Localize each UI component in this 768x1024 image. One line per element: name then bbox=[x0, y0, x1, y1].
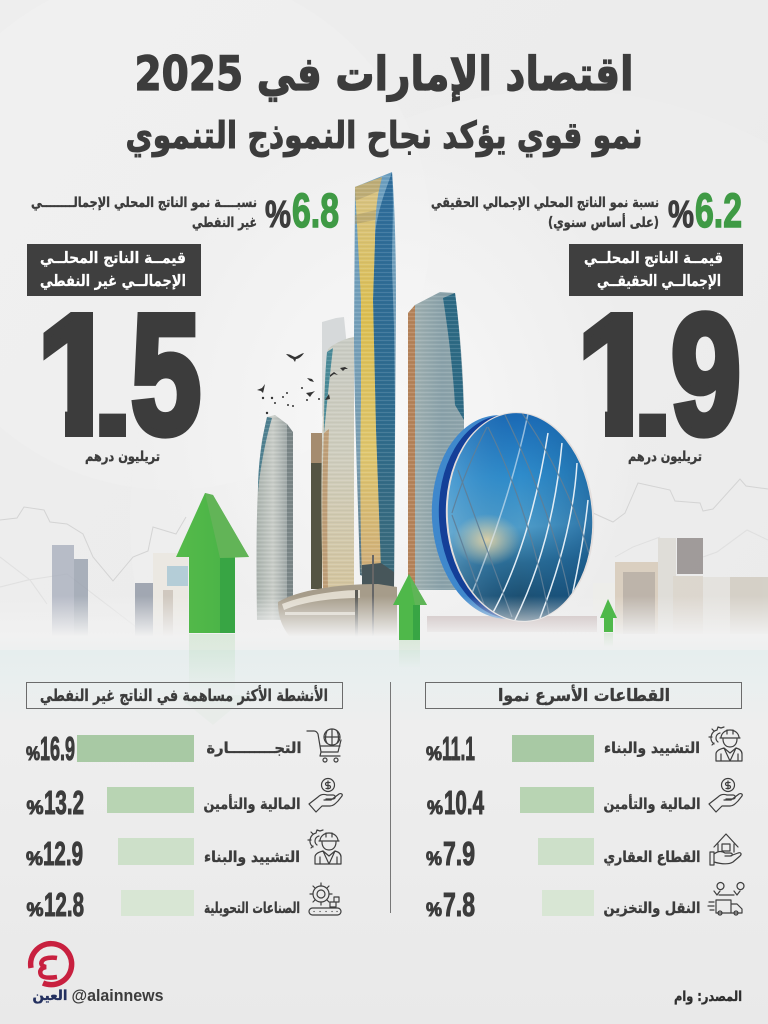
big number 1.5: . bbox=[91, 318, 134, 463]
big number 1.5: 5 bbox=[131, 280, 201, 469]
skyline left bbox=[52, 545, 188, 640]
stat: real GDP growth: 6.2 bbox=[695, 185, 742, 238]
row: trade: التجـــــــــارة bbox=[206, 739, 302, 757]
row: trade bbox=[26, 729, 341, 767]
stat: non-oil GDP growth: نسبــــة نمو الناتج المحلي الإجمالــــــــي bbox=[31, 195, 257, 211]
label box: non-oil GDP value bbox=[27, 244, 201, 296]
panel: top contributors to non-oil GDP bbox=[26, 682, 342, 923]
row: finance and insurance bbox=[427, 778, 742, 821]
stat: real GDP growth bbox=[431, 185, 742, 238]
panel heading: القطاعات الأسرع نموا bbox=[498, 685, 670, 706]
row: construction: 11.1 bbox=[442, 730, 475, 767]
tower: dark narrow tower bbox=[311, 433, 322, 589]
stat: non-oil GDP growth: % bbox=[265, 194, 291, 236]
towers bbox=[0, 172, 768, 650]
row: finance and insurance: % bbox=[26, 798, 44, 819]
row: real estate: القطاع العقاري bbox=[604, 848, 700, 867]
stat: non-oil GDP growth bbox=[31, 185, 339, 238]
source: المصدر: وام bbox=[674, 989, 742, 1005]
big number 1.9: 9 bbox=[671, 280, 741, 469]
row: construction bbox=[426, 727, 742, 767]
big green arrow bbox=[176, 493, 249, 633]
icon: gear and conveyor bbox=[309, 883, 341, 915]
subtitle: نمو قوي يؤكد نجاح النموذج التنموي bbox=[126, 114, 642, 157]
row: transport and storage: % bbox=[426, 900, 442, 921]
unit: trillion dirham right: تريليون درهم bbox=[628, 449, 702, 465]
tower: beige round tower bbox=[321, 337, 354, 589]
small green arrow bbox=[600, 599, 617, 632]
row: finance and insurance: 10.4 bbox=[444, 784, 484, 821]
panel: fastest growing sectors bbox=[426, 682, 744, 923]
row: finance and insurance: المالية والتأمين bbox=[604, 794, 700, 813]
title: اقتصاد الإمارات في 2025 bbox=[135, 47, 634, 102]
stat: real GDP growth: % bbox=[668, 194, 694, 236]
stat: non-oil GDP growth: غير النفطي bbox=[192, 215, 257, 231]
row: finance and insurance: المالية والتأمين bbox=[204, 794, 300, 813]
tower: left slim tower bbox=[257, 415, 293, 620]
panel heading bbox=[426, 682, 742, 708]
big number 1.9: . bbox=[631, 318, 674, 463]
arrow reflections bbox=[176, 633, 613, 725]
label box: real GDP value: قيمــة الناتج المحلــي bbox=[584, 249, 723, 268]
label box: non-oil GDP value: الإجمالــي غير النفطي bbox=[40, 272, 186, 291]
label box: non-oil GDP value: قيمــة الناتج المحلــي bbox=[40, 249, 186, 268]
label box: real GDP value bbox=[569, 244, 743, 296]
icon: house on hand bbox=[710, 834, 741, 865]
row: manufacturing: 12.8 bbox=[44, 886, 84, 923]
stat: real GDP growth: نسبة نمو الناتج المحلي الإجمالي الحقيقي bbox=[431, 195, 659, 211]
row: construction: % bbox=[426, 744, 442, 765]
skyline right bbox=[593, 538, 768, 634]
label box: real GDP value: الإجمالــي الحقيقــي bbox=[597, 272, 721, 291]
panel heading: الأنشطة الأكثر مساهمة في الناتج غير النفطي bbox=[40, 685, 328, 706]
stat: real GDP growth: (على أساس سنوي) bbox=[548, 213, 659, 232]
tower: central gold and blue tower bbox=[354, 172, 396, 587]
row: trade: % bbox=[26, 744, 40, 765]
row: manufacturing: % bbox=[26, 900, 44, 921]
row: real estate: % bbox=[426, 849, 442, 870]
tower: back light tower bbox=[322, 317, 350, 417]
row: real estate bbox=[426, 834, 741, 872]
row: trade: 16.9 bbox=[40, 730, 75, 767]
big number 1.5: 1 bbox=[37, 280, 117, 470]
row: real estate: 7.9 bbox=[443, 835, 475, 872]
podium bbox=[278, 555, 397, 640]
row: manufacturing: الصناعات التحويلية bbox=[204, 899, 300, 917]
logo: Al Ain News bbox=[31, 944, 72, 1004]
row: finance and insurance: % bbox=[427, 798, 443, 819]
faded market line chart bbox=[0, 479, 768, 630]
tower: Aldar disc building bbox=[425, 407, 601, 632]
base fade into floor bbox=[0, 596, 768, 650]
row: construction bbox=[26, 830, 341, 872]
row: construction: % bbox=[26, 849, 43, 870]
row: construction: 12.9 bbox=[43, 835, 83, 872]
unit: trillion dirham left: تريليون درهم bbox=[85, 449, 160, 465]
birds bbox=[257, 353, 348, 414]
social handle: @alainnews bbox=[72, 987, 164, 1005]
icon: delivery truck bbox=[708, 883, 744, 915]
row: construction: التشييد والبناء bbox=[204, 848, 300, 866]
middle green arrow bbox=[393, 574, 427, 640]
big number 1.9 bbox=[583, 310, 740, 439]
row: finance and insurance bbox=[26, 778, 342, 821]
big number 1.5 bbox=[43, 312, 200, 439]
panel heading bbox=[26, 682, 342, 708]
logo: Al Ain News: العين bbox=[32, 988, 68, 1004]
row: transport and storage bbox=[426, 883, 744, 923]
row: construction: التشييد والبناء bbox=[604, 739, 700, 757]
row: manufacturing bbox=[26, 883, 341, 923]
big number 1.9: 1 bbox=[577, 280, 657, 470]
row: transport and storage: 7.8 bbox=[443, 886, 475, 923]
row: transport and storage: النقل والتخزين bbox=[604, 899, 700, 917]
stat: non-oil GDP growth: 6.8 bbox=[292, 185, 339, 238]
icon: globe cart bbox=[307, 729, 341, 762]
tower: right tall tower bbox=[408, 292, 464, 590]
row: finance and insurance: 13.2 bbox=[44, 784, 84, 821]
